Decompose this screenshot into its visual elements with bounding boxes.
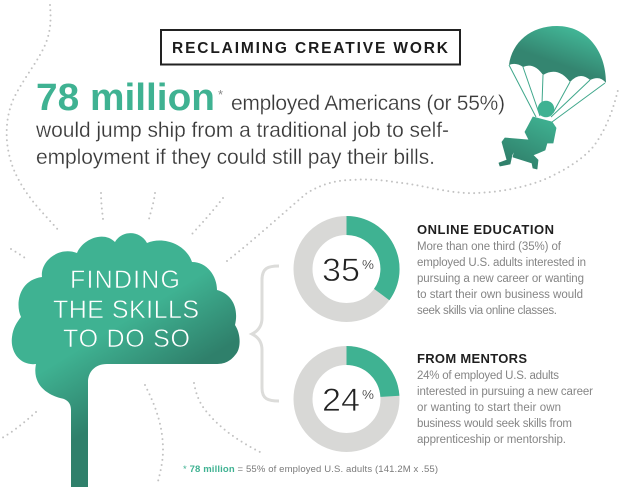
text block: from mentors: apprenticeship or mentorship. — [417, 434, 566, 446]
tree heading — [53, 266, 199, 353]
text block: online education: ONLINE EDUCATION — [417, 222, 554, 237]
text block: from mentors: 24% of employed U.S. adults — [417, 370, 559, 382]
title: RECLAIMING CREATIVE WORK — [172, 40, 449, 57]
text block: from mentors: FROM MENTORS — [417, 351, 527, 366]
headline statistic text: * — [218, 87, 223, 102]
donut chart: 24 percent: % — [362, 387, 374, 402]
text block: online education: seek skills via online classes. — [417, 305, 557, 317]
icon: parachutist — [499, 26, 606, 169]
text block: online education — [417, 222, 586, 317]
text block: from mentors — [417, 351, 593, 446]
headline statistic text: 78 million — [36, 77, 215, 119]
tree heading: TO DO SO — [63, 325, 190, 353]
headline statistic text: would jump ship from a traditional job to self- — [35, 119, 449, 142]
headline statistic text: employed Americans (or 55%) — [231, 92, 505, 115]
donut chart: 24 percent: 24 — [322, 382, 360, 418]
text block: from mentors: or wanting to start their own — [417, 402, 561, 414]
tree heading: THE SKILLS — [53, 296, 199, 324]
text block: from mentors: interested in pursuing a new career — [417, 386, 593, 398]
text block: online education: to start their own business would — [417, 289, 583, 301]
footnote: * 78 million = 55% of employed U.S. adults (141.2M x .55) — [183, 464, 438, 475]
donut chart: 35 percent — [303, 216, 400, 312]
text block: online education: employed U.S. adults interested in — [417, 257, 586, 269]
donut chart: 35 percent: 35 — [322, 252, 360, 288]
text block: online education: pursuing a new career or wanting — [417, 273, 584, 285]
donut chart: 35 percent: % — [362, 257, 374, 272]
text block: online education: More than one third (35%) of — [417, 241, 562, 253]
headline statistic text — [35, 77, 505, 169]
text block: from mentors: business would seek skills from — [417, 418, 572, 430]
tree heading: FINDING — [70, 266, 180, 294]
brace — [252, 266, 279, 401]
donut chart: 24 percent — [303, 346, 399, 442]
title — [161, 30, 460, 64]
headline statistic text: employment if they could still pay their bills. — [36, 146, 435, 169]
tree shape — [12, 233, 240, 487]
